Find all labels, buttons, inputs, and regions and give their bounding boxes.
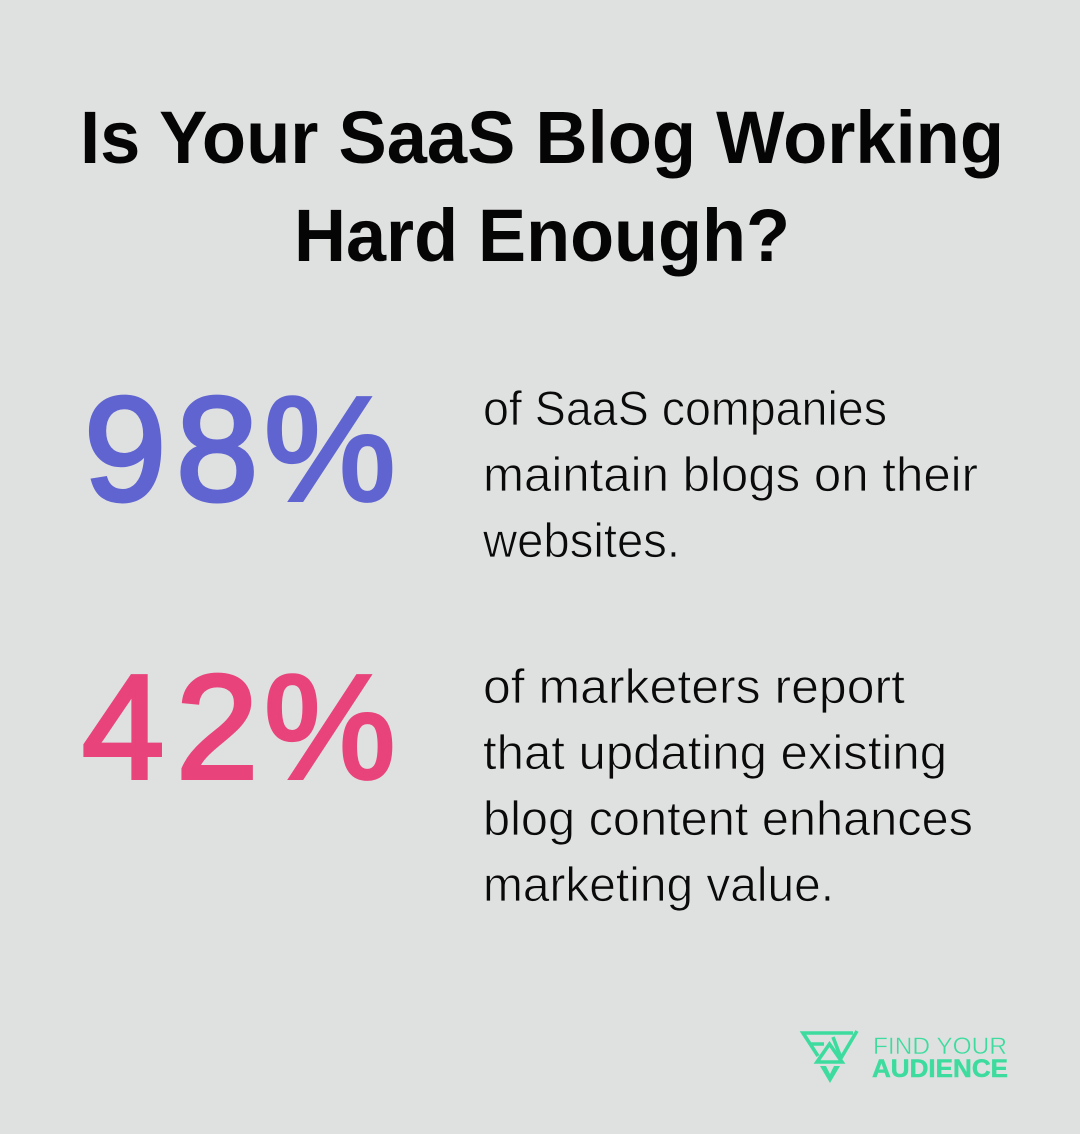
title: Is Your SaaS Blog Working [80,96,1004,179]
wordmark [872,1033,1008,1083]
description: 42% stat: marketing value. [483,859,834,912]
stat: 42%: 42% [82,645,396,810]
title: Hard Enough? [294,194,790,277]
description: 42% stat: of marketers report [483,661,905,714]
icon: triangle logo mark [803,1031,857,1083]
wordmark: AUDIENCE [872,1055,1008,1083]
description: 42% stat: that updating existing [483,727,947,780]
description: 98% stat: websites. [482,515,680,568]
description: 42% stat [483,661,973,912]
description: 98% stat: maintain blogs on their [483,449,978,502]
wordmark: FIND YOUR [873,1033,1007,1060]
description: 42% stat: blog content enhances [483,793,973,846]
title [80,96,1004,277]
description: 98% stat [482,383,978,568]
logo: Find Your Audience [803,1031,1008,1083]
description: 98% stat: of SaaS companies [483,383,887,436]
stat: 98%: 98% [84,367,396,532]
